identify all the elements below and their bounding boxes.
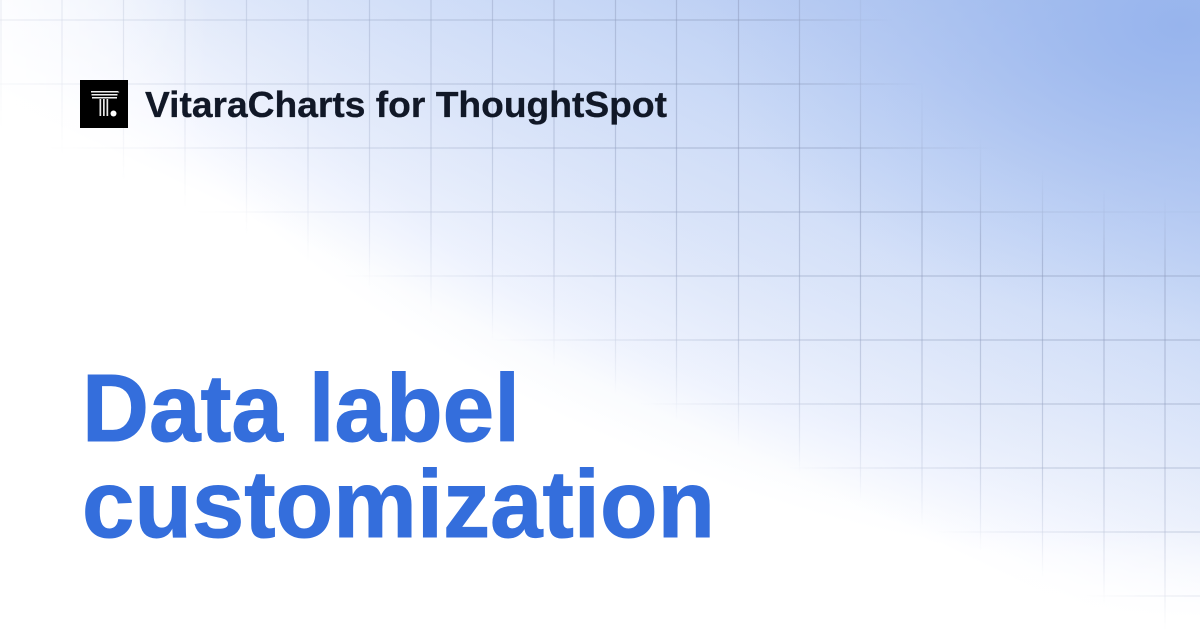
- title: customization: [82, 451, 715, 558]
- title: [82, 355, 715, 558]
- title: Data label: [82, 355, 520, 462]
- heading: product name: VitaraCharts for ThoughtSpot: [145, 84, 667, 125]
- icon: ThoughtSpot logo: [80, 80, 128, 128]
